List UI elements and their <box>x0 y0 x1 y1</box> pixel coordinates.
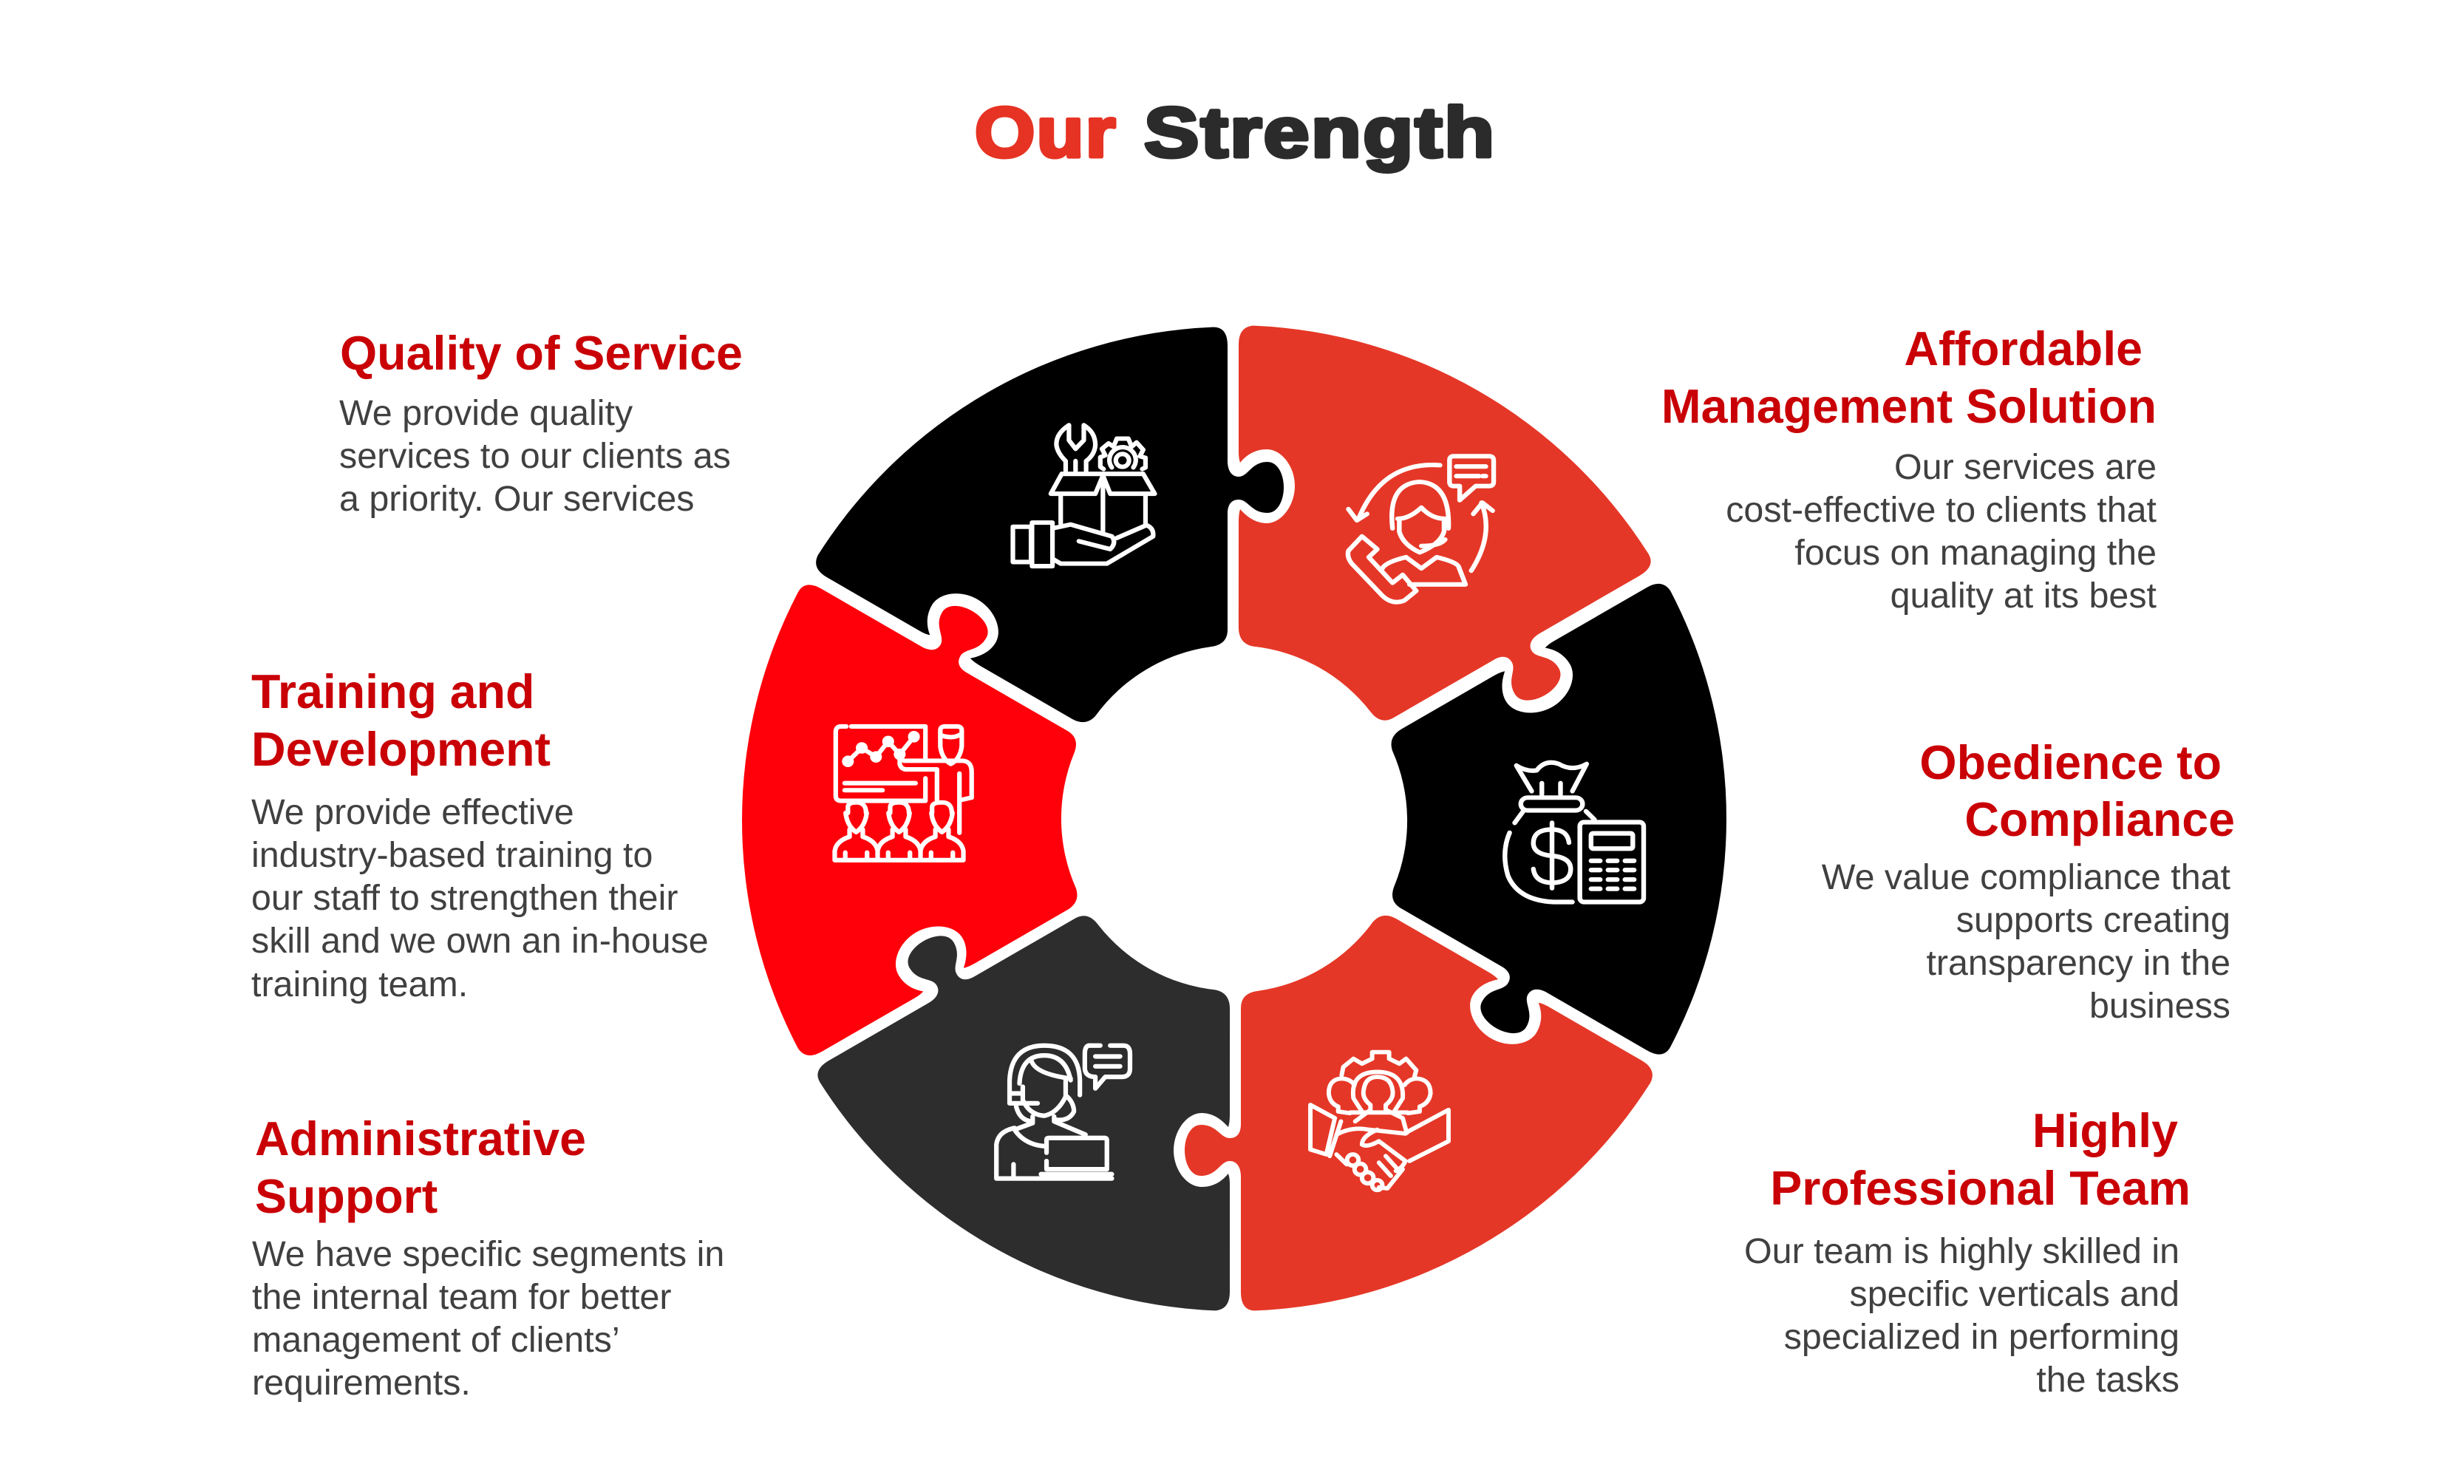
description: highly professional team: Our team is highly skilled in <box>1744 1231 2179 1271</box>
icon: presenter with chart and audience <box>834 726 972 860</box>
heading: administrative support: Support <box>255 1170 438 1223</box>
heading: affordable management solution <box>1661 322 2157 433</box>
description: highly professional team <box>1744 1231 2179 1400</box>
heading: affordable management solution: Management Solution <box>1661 380 2157 433</box>
heading: training and development: Development <box>251 723 551 776</box>
description: affordable management solution <box>1726 447 2157 616</box>
puzzle piece: orange top right <box>1108 210 1684 812</box>
description: highly professional team: the tasks <box>2036 1360 2179 1400</box>
description: administrative support <box>252 1234 724 1403</box>
icon: team gear and handshake <box>1310 1052 1449 1190</box>
text block: affordable management solution <box>1661 322 2157 616</box>
icon: tools in box on hand <box>1013 425 1154 566</box>
panel: affordable management solution segment <box>1108 210 1684 812</box>
heading: highly professional team: Professional Team <box>1770 1162 2191 1215</box>
description: training and development: skill and we own an in-house <box>251 921 709 961</box>
title: Our <box>975 93 1117 172</box>
description: obedience to compliance: We value compliance that <box>1822 857 2231 897</box>
panel: highly professional team segment <box>1185 916 1653 1310</box>
puzzle piece: red left <box>599 531 1176 1134</box>
description: administrative support: We have specific segments in <box>252 1234 724 1274</box>
puzzle piece: black top left <box>816 327 1284 722</box>
heading: affordable management solution: Affordable <box>1904 322 2143 375</box>
panel: quality of service segment <box>816 327 1284 722</box>
icon: support agent with phone <box>1348 456 1494 602</box>
puzzle piece: dark grey bottom left <box>785 824 1361 1426</box>
text block: training and development <box>251 665 709 1004</box>
description: administrative support: requirements. <box>252 1363 471 1403</box>
description: affordable management solution: quality at its best <box>1890 576 2157 616</box>
icon: headset operator with laptop <box>996 1046 1130 1179</box>
heading: administrative support: Administrative <box>255 1112 586 1165</box>
puzzle piece: black right <box>1293 506 1869 1109</box>
description: training and development: industry-based training to <box>251 835 653 875</box>
description: highly professional team: specialized in performing <box>1784 1317 2179 1357</box>
puzzle piece: orange bottom right <box>1185 916 1653 1310</box>
description: training and development: our staff to strengthen their <box>251 878 678 918</box>
text block: administrative support <box>252 1112 724 1403</box>
description: highly professional team: specific verticals and <box>1850 1274 2179 1314</box>
description: affordable management solution: focus on managing the <box>1794 533 2157 573</box>
description: quality of service: a priority. Our services <box>339 479 694 519</box>
heading: obedience to compliance: Obedience to <box>1919 736 2222 789</box>
text block: highly professional team <box>1744 1104 2191 1400</box>
description: quality of service <box>339 393 731 519</box>
panel: obedience to compliance segment <box>1293 506 1869 1109</box>
description: obedience to compliance: transparency in the <box>1926 943 2230 983</box>
description: affordable management solution: Our services are <box>1894 447 2157 487</box>
description: training and development: training team. <box>251 964 468 1004</box>
description: quality of service: We provide quality <box>339 393 633 433</box>
description: obedience to compliance <box>1822 857 2231 1026</box>
description: obedience to compliance: supports creating <box>1956 900 2230 940</box>
title: Strength <box>1144 93 1496 172</box>
heading: obedience to compliance <box>1919 736 2235 846</box>
heading: highly professional team <box>1770 1104 2191 1215</box>
heading: obedience to compliance: Compliance <box>1964 793 2235 846</box>
description: training and development: We provide effective <box>251 792 574 832</box>
description: obedience to compliance: business <box>2089 986 2230 1026</box>
text block: obedience to compliance <box>1822 736 2235 1026</box>
description: affordable management solution: cost-effective to clients that <box>1726 490 2157 530</box>
title <box>975 93 1496 172</box>
description: administrative support: management of clients’ <box>252 1320 620 1360</box>
description: training and development <box>251 792 709 1004</box>
heading: training and development: Training and <box>251 665 534 718</box>
description: quality of service: services to our clients as <box>339 436 731 476</box>
panel: administrative support segment <box>785 824 1361 1426</box>
panel: training and development segment <box>599 531 1176 1134</box>
heading: training and development <box>251 665 551 776</box>
heading: highly professional team: Highly <box>2032 1104 2178 1157</box>
heading: quality of service: Quality of Service <box>340 327 743 380</box>
description: administrative support: the internal team for better <box>252 1277 672 1317</box>
icon: money bag and calculator <box>1505 763 1644 902</box>
text block: quality of service <box>339 327 743 519</box>
heading: administrative support <box>255 1112 586 1223</box>
